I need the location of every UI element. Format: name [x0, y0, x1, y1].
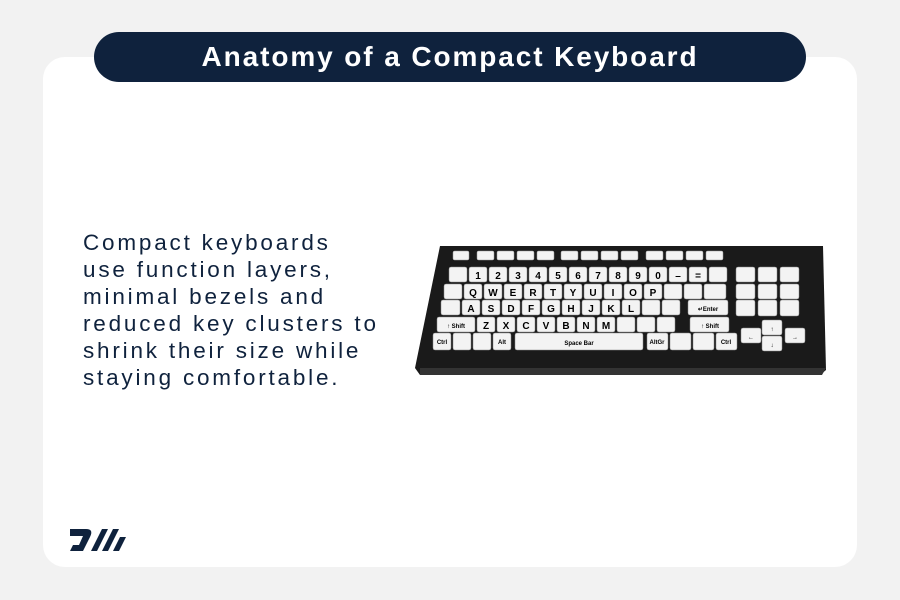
text block: shrink their size while [83, 338, 361, 363]
text block: Compact keyboards [83, 230, 331, 255]
keyboard image: V [543, 321, 550, 332]
keyboard image: 1 [475, 271, 481, 282]
keyboard image: 8 [615, 271, 621, 282]
keyboard image: Z [483, 321, 489, 332]
keyboard image: 9 [635, 271, 641, 282]
text block: reduced key clusters to [83, 311, 379, 336]
keyboard image: – [675, 271, 681, 282]
keyboard image: J [588, 304, 594, 315]
keyboard image: O [629, 288, 637, 299]
keyboard image: C [522, 321, 530, 332]
keyboard image: Space Bar [564, 341, 594, 347]
title: Anatomy of a Compact Keyboard [202, 41, 698, 72]
keyboard image: Ctrl [437, 340, 447, 346]
keyboard image: G [547, 304, 555, 315]
keyboard image: H [567, 304, 575, 315]
keyboard image: 3 [515, 271, 521, 282]
keyboard image: → [792, 335, 798, 341]
keyboard image: 7 [595, 271, 601, 282]
keyboard image: Alt [498, 340, 506, 346]
keyboard image: 2 [495, 271, 501, 282]
text block: staying comfortable. [83, 365, 340, 390]
keyboard image: 6 [575, 271, 581, 282]
keyboard image: P [650, 288, 657, 299]
keyboard image: ↓ [770, 343, 774, 349]
white card panel [43, 57, 857, 567]
keyboard image: Ctrl [721, 340, 731, 346]
keyboard image: T [550, 288, 556, 299]
keyboard image: ↑ Shift [701, 324, 719, 330]
keyboard image: D [507, 304, 515, 315]
keyboard image: 4 [535, 271, 541, 282]
keyboard image: Q [469, 288, 477, 299]
keyboard image: ↑ Shift [447, 324, 465, 330]
keyboard image: AltGr [650, 340, 665, 346]
keyboard image: B [562, 321, 570, 332]
keyboard image: M [602, 321, 610, 332]
keyboard image: S [488, 304, 495, 315]
title [94, 32, 806, 82]
keyboard image: A [467, 304, 475, 315]
keyboard image: N [582, 321, 590, 332]
logo [70, 529, 126, 551]
keyboard image: R [529, 288, 537, 299]
keyboard image: K [607, 304, 615, 315]
keyboard image: 5 [555, 271, 561, 282]
keyboard image: U [589, 288, 597, 299]
keyboard image [415, 246, 826, 375]
keyboard image: = [695, 271, 701, 282]
keyboard image: L [628, 304, 634, 315]
keyboard image: 0 [655, 271, 661, 282]
text block: minimal bezels and [83, 284, 326, 309]
keyboard image: ↵Enter [698, 307, 719, 313]
text block: use function layers, [83, 257, 333, 282]
keyboard image: X [503, 321, 510, 332]
keyboard image: Y [570, 288, 577, 299]
text block [83, 230, 379, 390]
keyboard image: ← [748, 335, 754, 341]
keyboard image: I [612, 288, 615, 299]
keyboard image: E [510, 288, 517, 299]
keyboard image: F [528, 304, 534, 315]
keyboard image: W [488, 288, 498, 299]
keyboard image: ↑ [770, 327, 774, 333]
